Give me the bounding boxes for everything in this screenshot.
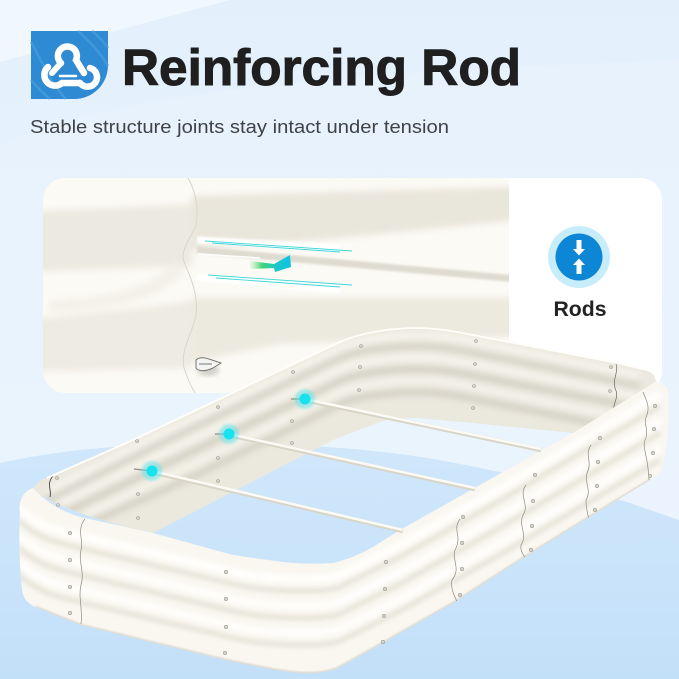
subtitle: Stable structure joints stay intact under tension	[30, 117, 449, 137]
panel: rod close-up card	[43, 178, 662, 393]
icon: rods badge	[548, 226, 610, 288]
rod 1	[134, 461, 403, 531]
title: Reinforcing Rod	[122, 39, 521, 96]
front outer wall	[10, 370, 675, 679]
inner wall	[34, 338, 657, 533]
wall seam left	[49, 476, 53, 497]
white section of the card	[509, 178, 662, 382]
rods with markers	[134, 389, 541, 531]
bolt	[196, 358, 221, 376]
joint seam	[183, 178, 197, 393]
front seams	[80, 392, 649, 624]
rivets	[56, 340, 657, 655]
wall seam right	[614, 361, 617, 410]
raised bed illustration	[10, 320, 675, 679]
rod 3	[291, 389, 541, 450]
cyan motion lines	[205, 241, 352, 287]
rod 2	[215, 424, 475, 489]
back rim highlight	[47, 328, 657, 478]
arrow: green to cyan	[250, 255, 291, 272]
close-up photo of rod joint	[43, 178, 662, 393]
icon: linked nodes badge	[31, 31, 108, 99]
rod	[197, 240, 540, 290]
label: Rods: Rods	[554, 298, 606, 321]
